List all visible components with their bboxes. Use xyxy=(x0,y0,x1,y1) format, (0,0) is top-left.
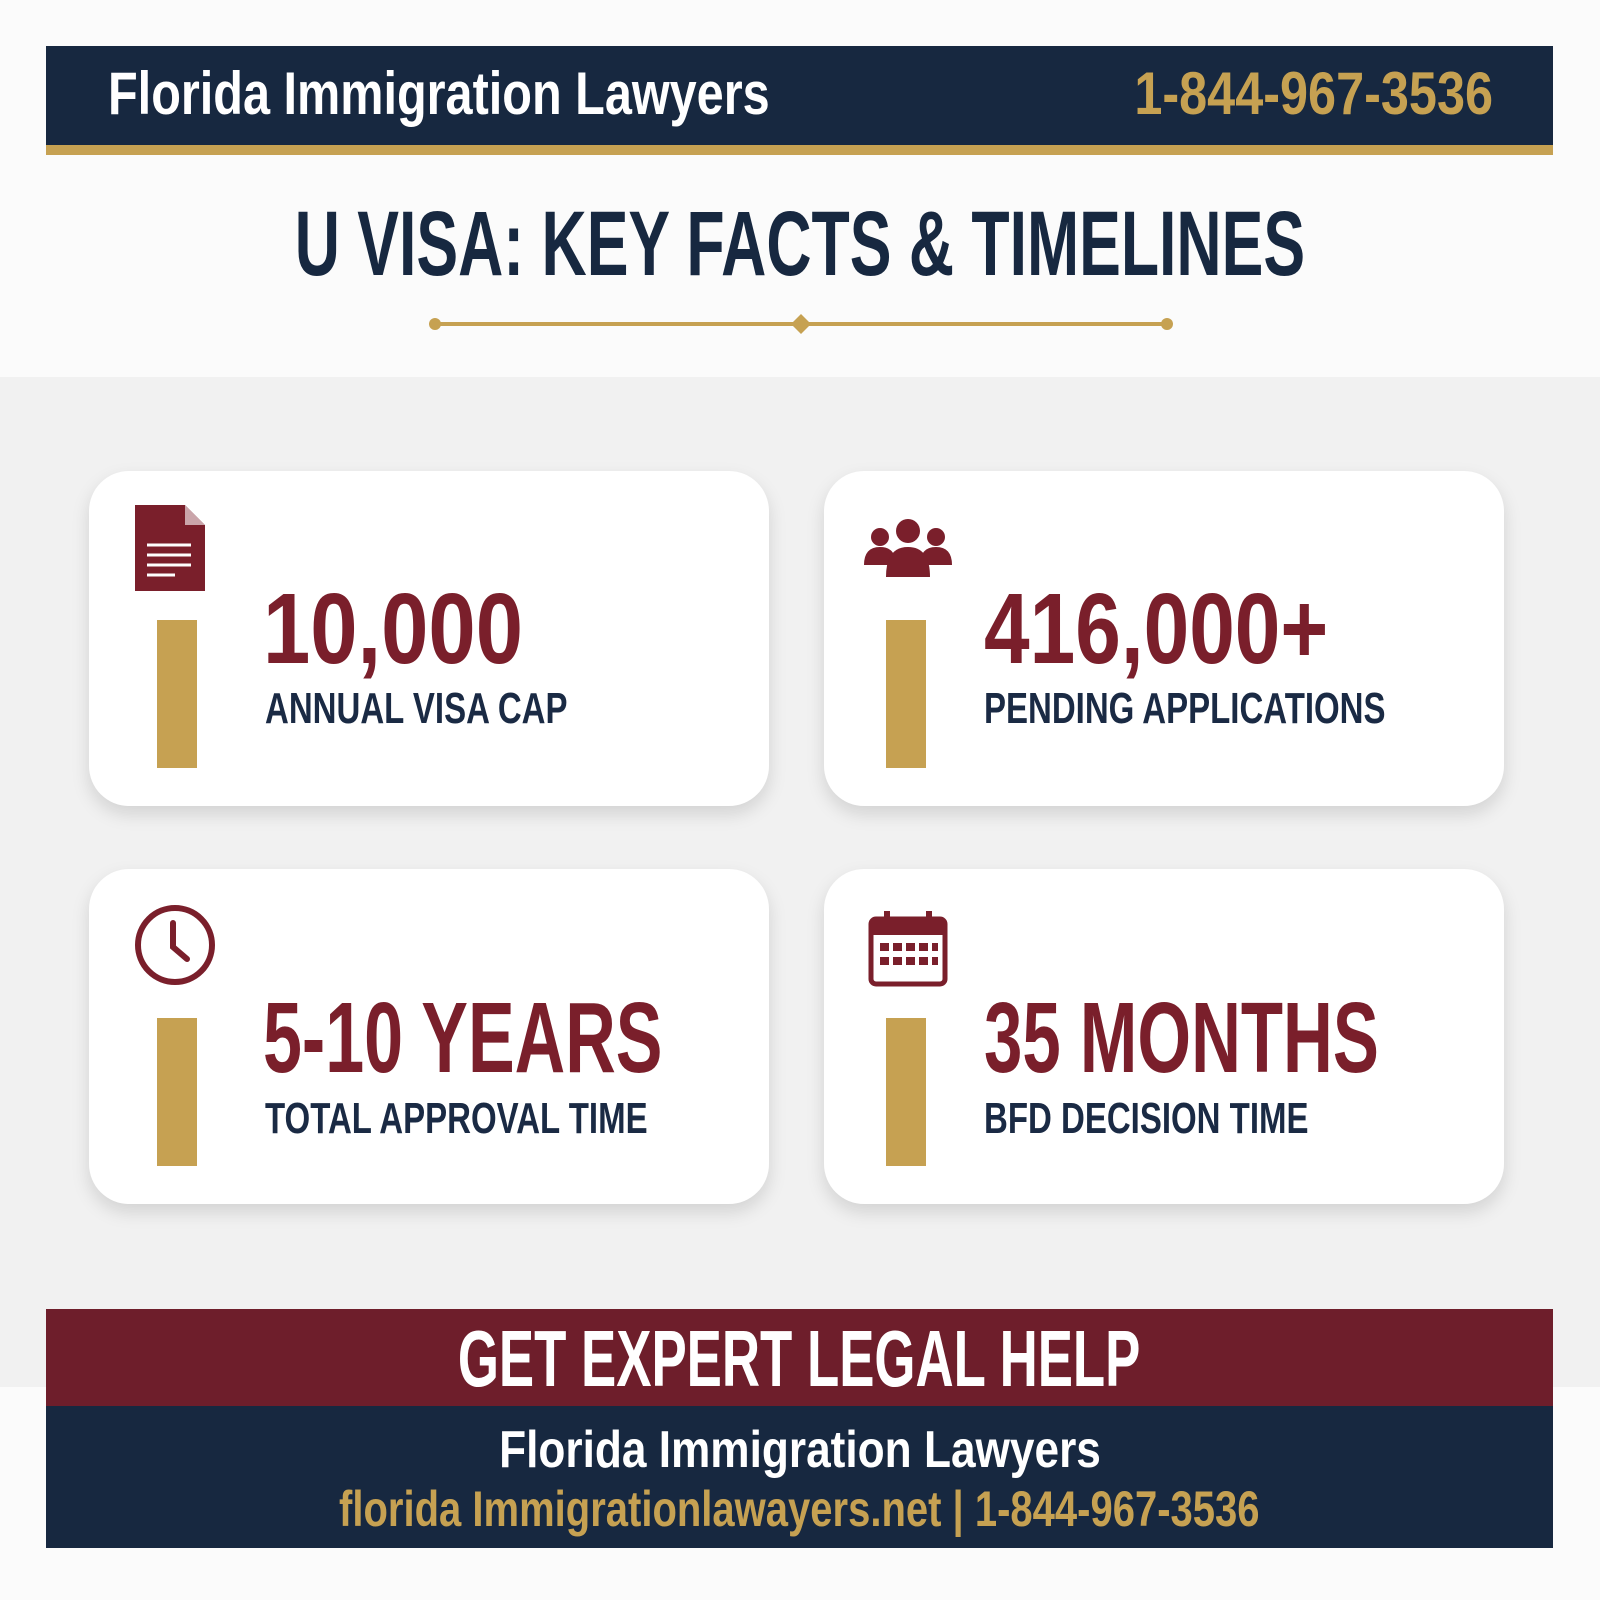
stat label: ANNUAL VISA CAP xyxy=(265,684,568,733)
stat label: TOTAL APPROVAL TIME xyxy=(265,1094,648,1143)
stat number: 10,000 xyxy=(263,573,523,685)
card: BFD decision time xyxy=(824,869,1504,1204)
header bar xyxy=(46,46,1553,145)
icon: document xyxy=(135,505,205,591)
stat label: BFD DECISION TIME xyxy=(984,1094,1309,1143)
footer website and phone: florida Immigrationlawayers.net | 1-844-967-3536 xyxy=(339,1481,1260,1537)
footer call to action: GET EXPERT LEGAL HELP xyxy=(458,1314,1141,1403)
icon: clock xyxy=(135,905,215,985)
footer firm name: Florida Immigration Lawyers xyxy=(499,1421,1100,1479)
footer contact xyxy=(46,1406,1553,1548)
stat number: 35 MONTHS xyxy=(984,982,1379,1094)
title: U VISA: KEY FACTS & TIMELINES xyxy=(295,193,1305,295)
icon: calendar xyxy=(868,911,948,986)
card: total approval time xyxy=(89,869,769,1204)
card: annual visa cap xyxy=(89,471,769,806)
header firm name: Florida Immigration Lawyers xyxy=(108,60,770,127)
icon: people xyxy=(864,519,952,577)
stat number: 416,000+ xyxy=(984,573,1328,685)
gray content background xyxy=(0,377,1600,1387)
card: pending applications xyxy=(824,471,1504,806)
title divider ornament xyxy=(429,314,1173,334)
stat label: PENDING APPLICATIONS xyxy=(984,684,1386,733)
footer call to action xyxy=(46,1309,1553,1406)
header phone: 1-844-967-3536 xyxy=(1134,60,1493,127)
stat number: 5-10 YEARS xyxy=(263,982,662,1094)
